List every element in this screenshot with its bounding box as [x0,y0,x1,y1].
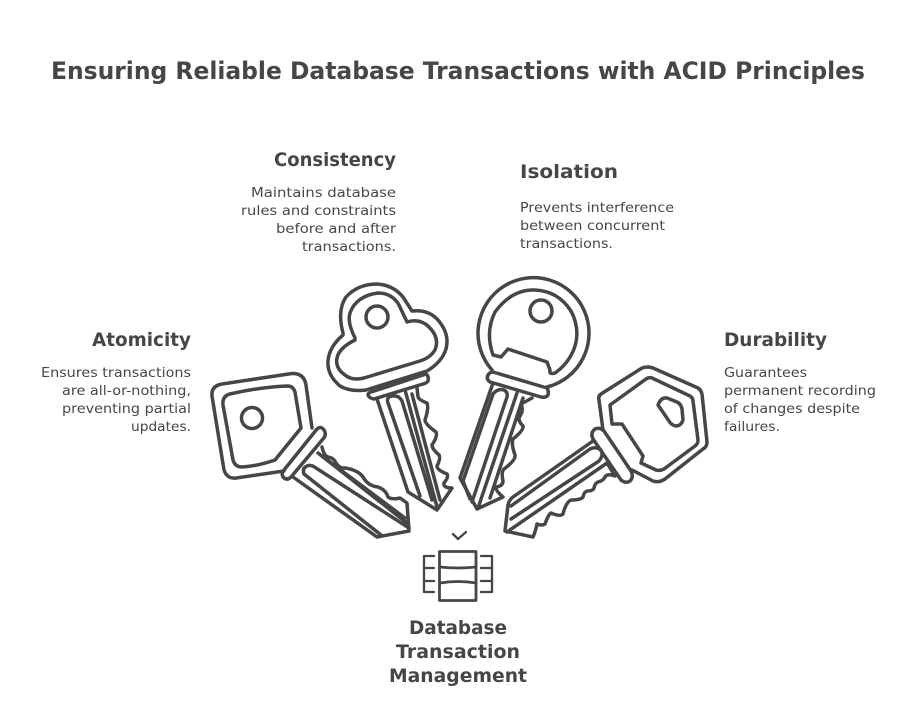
panel: central label: Management [389,665,527,687]
panel: atomicity text: updates. [131,419,191,435]
panel: isolation text: Prevents interference [520,200,674,216]
panel: consistency text [241,149,397,255]
panel: atomicity text: Ensures transactions [41,365,191,381]
icon: durability key [505,367,707,537]
panel: isolation text: transactions. [520,236,613,252]
panel: consistency text: before and after [276,221,396,237]
panel: durability text [724,329,876,435]
icon: consistency key [328,284,452,510]
panel: consistency text: transactions. [302,239,396,255]
panel: atomicity text: are all-or-nothing, [62,383,191,399]
panel: durability text: Durability [724,329,828,351]
panel: consistency text: Consistency [274,149,397,171]
icon: isolation key [460,278,589,509]
panel: central label: Transaction [396,641,520,663]
icon: atomicity key [212,373,409,537]
panel: isolation text [520,161,674,252]
panel: central label: Database [409,617,507,639]
panel: atomicity text: Atomicity [92,329,192,351]
panel: consistency text: Maintains database [251,185,396,201]
title: Ensuring Reliable Database Transactions with ACID Principles [51,57,865,85]
panel: central label [389,617,527,687]
icon: database with check [424,532,492,600]
panel: consistency text: rules and constraints [241,203,396,219]
panel: isolation text: between concurrent [520,218,665,234]
panel: durability text: permanent recording [724,383,876,399]
panel: durability text: failures. [724,419,780,435]
panel: durability text: Guarantees [724,365,807,381]
panel: atomicity text: preventing partial [62,401,191,417]
panel: atomicity text [41,329,192,435]
panel: durability text: of changes despite [724,401,860,417]
panel: isolation text: Isolation [520,161,618,183]
